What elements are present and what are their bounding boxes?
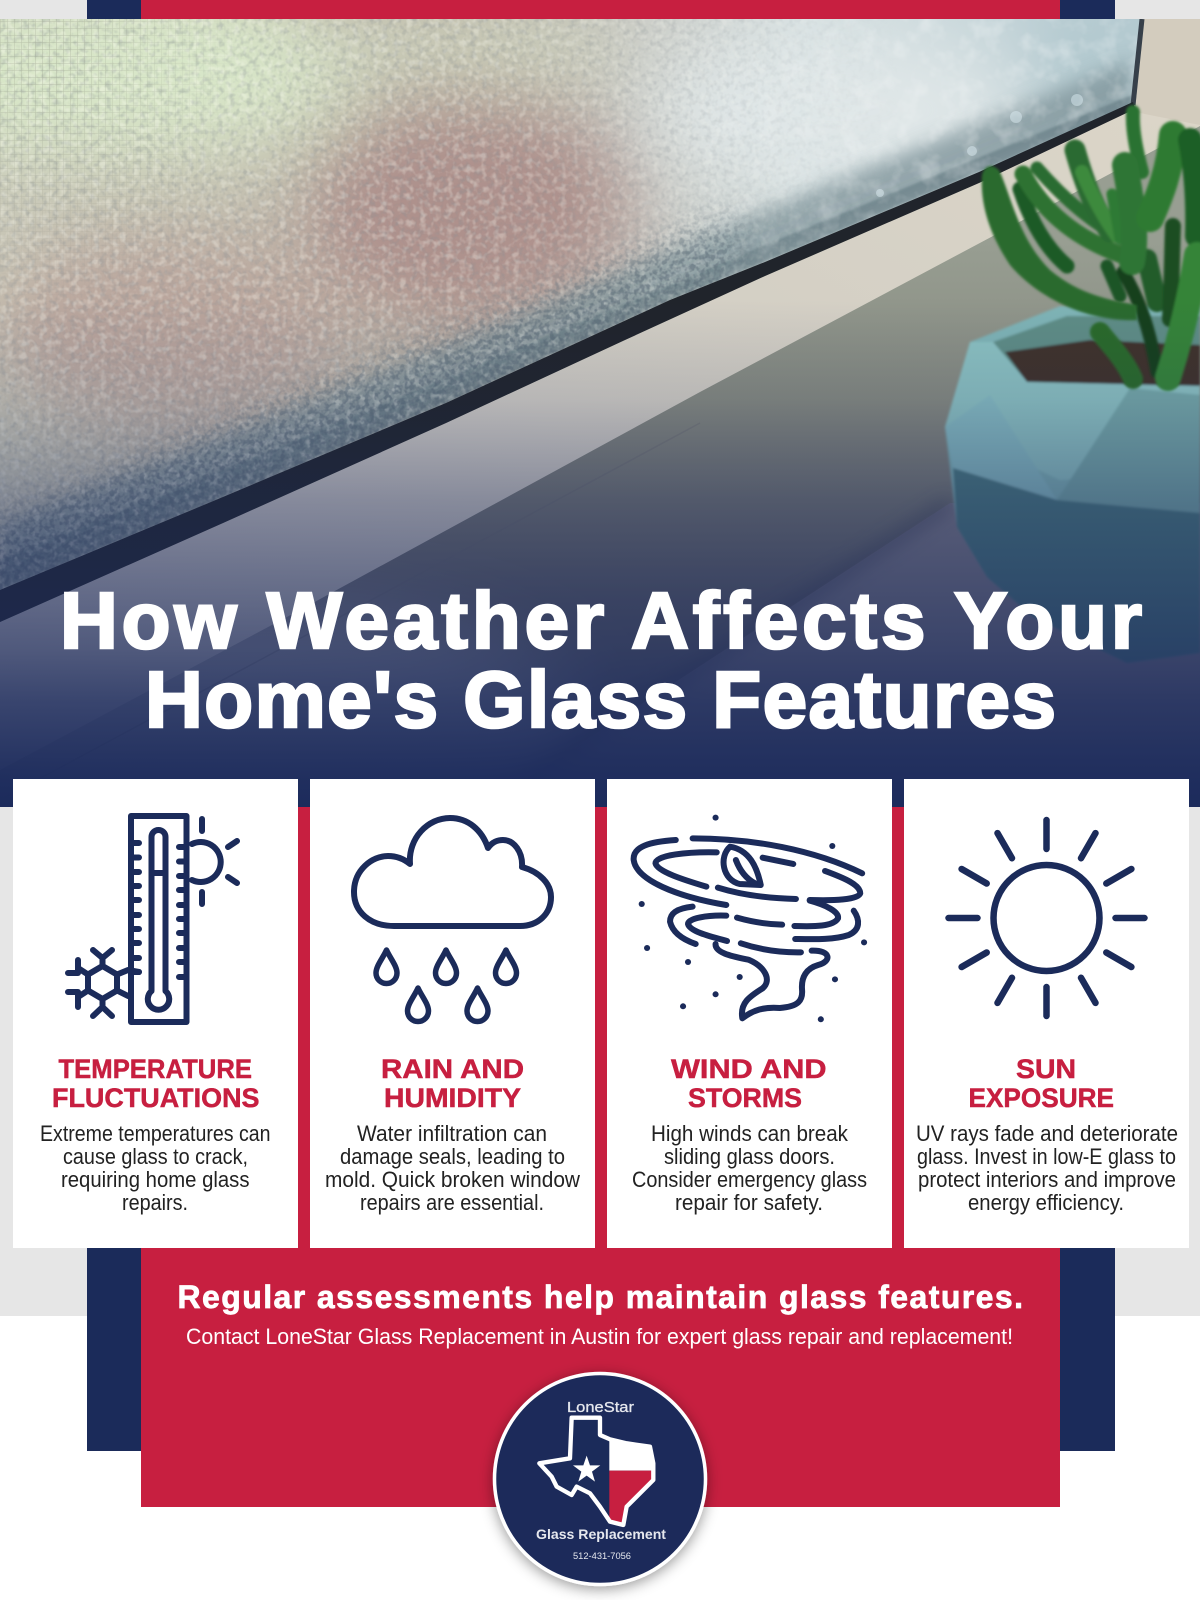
body text: repair for safety.: [675, 1190, 823, 1215]
shadow edge between sill and table: [778, 504, 949, 617]
logo badge: LoneStar Glass Replacement: [494, 1374, 706, 1584]
condensation on glass: [0, 19, 1143, 590]
body text: damage seals, leading to: [340, 1144, 565, 1169]
icon: tornado with leaf: [634, 815, 867, 1022]
heading: EXPOSURE: [968, 1083, 1114, 1113]
heading: TEMPERATURE: [58, 1054, 252, 1084]
heading: HUMIDITY: [384, 1083, 521, 1113]
body text: UV rays fade and deteriorate: [916, 1121, 1178, 1146]
heading: FLUCTUATIONS: [52, 1083, 260, 1113]
body text: [325, 1121, 580, 1215]
body text: cause glass to crack,: [63, 1144, 248, 1169]
body text: energy efficiency.: [968, 1190, 1124, 1215]
heading: RAIN AND: [381, 1054, 524, 1084]
body text: Water infiltration can: [357, 1121, 547, 1146]
panel: temperature fluctuations: [13, 779, 298, 1248]
navy fade over photo: [0, 300, 1200, 807]
heading: [381, 1054, 524, 1113]
title: Home's Glass Features: [145, 655, 1056, 744]
logo wordmark: Glass Replacement: [536, 1526, 666, 1542]
panel: sun exposure: [904, 779, 1189, 1248]
panel: wind and storms: [607, 779, 892, 1248]
sill crease line: [677, 423, 700, 435]
table surface: [736, 503, 1200, 668]
icon: Texas flag map: [539, 1418, 653, 1525]
body text: mold. Quick broken window: [325, 1167, 580, 1192]
hero photo: condensation on window with potted plant: [0, 0, 1200, 850]
logo wordmark: [536, 1399, 666, 1561]
heading: STORMS: [688, 1083, 802, 1113]
body text: [632, 1121, 867, 1215]
body text: High winds can break: [651, 1121, 849, 1146]
body text: repairs.: [122, 1190, 188, 1215]
window frame, upper right: [1135, 19, 1200, 125]
call to action text: [178, 1279, 1023, 1349]
body text: repairs are essential.: [360, 1190, 544, 1215]
body text: sliding glass doors.: [664, 1144, 835, 1169]
window sill top: [0, 113, 1200, 693]
icon: sun: [948, 820, 1144, 1016]
heading: SUN: [1016, 1054, 1076, 1084]
red backing panel: [141, 0, 1060, 1507]
body text: Extreme temperatures can: [40, 1121, 270, 1146]
body text: requiring home glass: [61, 1167, 250, 1192]
heading: [671, 1054, 826, 1113]
body text: Consider emergency glass: [632, 1167, 867, 1192]
heading: [968, 1054, 1114, 1113]
panel: rain and humidity: [310, 779, 595, 1248]
body text: glass. Invest in low-E glass to: [917, 1144, 1176, 1169]
plant pot: [945, 306, 1200, 663]
body text: [916, 1121, 1178, 1215]
icon: thermometer with sun and snowflake: [68, 816, 237, 1022]
title: How Weather Affects Your: [60, 576, 1142, 665]
heading: [52, 1054, 260, 1113]
call to action text: Regular assessments help maintain glass features.: [178, 1279, 1023, 1315]
body text: protect interiors and improve: [918, 1167, 1176, 1192]
title: [60, 576, 1142, 744]
call to action text: Contact LoneStar Glass Replacement in Austin for expert glass repair and replacement!: [186, 1324, 1013, 1349]
large front leaf: [982, 166, 1137, 320]
navy backing panel: [87, 0, 1115, 1451]
succulent plant: [1020, 112, 1197, 379]
dark window seal: [0, 102, 1135, 622]
heading: WIND AND: [671, 1054, 826, 1084]
glass edge shadow: [1133, 19, 1142, 105]
icon: rain cloud: [354, 818, 551, 1022]
body text: [40, 1121, 270, 1215]
logo wordmark: 512-431-7056: [573, 1551, 631, 1561]
logo wordmark: LoneStar: [567, 1399, 634, 1416]
